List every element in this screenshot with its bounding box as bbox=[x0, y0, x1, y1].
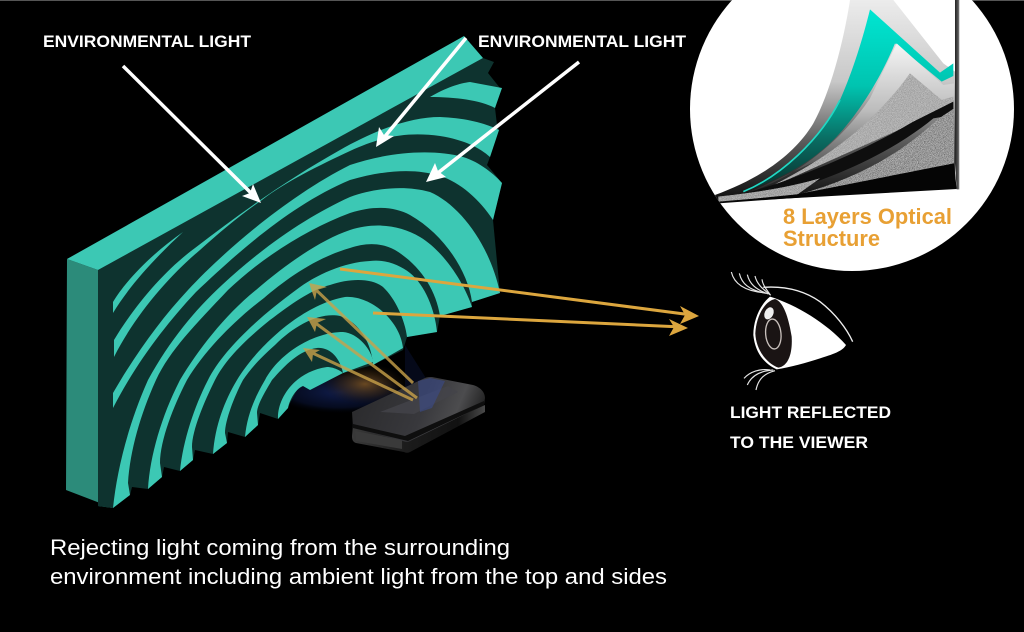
ray arrow 1 bbox=[309, 283, 413, 383]
reflected light arrows to viewer bbox=[340, 269, 699, 336]
white arrow middle bbox=[376, 38, 466, 147]
white arrow left bbox=[123, 66, 261, 203]
icon: viewer eye bbox=[731, 272, 853, 390]
reflected arrow upper bbox=[340, 269, 699, 324]
label: environmental light left: ENVIRONMENTAL LIGHT bbox=[43, 33, 251, 51]
pupil ring bbox=[764, 318, 782, 350]
caption: rejecting light description: Rejecting light coming from the surrounding bbox=[50, 535, 510, 560]
projector light glow bbox=[268, 345, 430, 414]
wall dark front face bbox=[98, 58, 502, 508]
reflected arrow lower bbox=[373, 313, 688, 336]
eyelashes bbox=[731, 272, 775, 390]
label: light reflected to the viewer: LIGHT REFLECTED bbox=[730, 404, 891, 422]
panel: 8 layers optical structure circle bbox=[690, 0, 1014, 271]
highlight bbox=[762, 306, 776, 321]
caption: 8 layers optical structure: 8 Layers Optical bbox=[783, 204, 952, 229]
caption: rejecting light description bbox=[50, 535, 667, 589]
wave-shaped screen wall bbox=[66, 36, 502, 508]
teal arc bands bbox=[113, 82, 502, 508]
caption: 8 layers optical structure bbox=[783, 204, 952, 251]
iris bbox=[755, 299, 792, 368]
projector top body bbox=[352, 377, 485, 442]
caption: 8 layers optical structure: Structure bbox=[783, 226, 880, 251]
label: environmental light right: ENVIRONMENTAL LIGHT bbox=[478, 33, 686, 51]
wall top band bbox=[67, 36, 483, 270]
label: light reflected to the viewer bbox=[730, 404, 891, 452]
eye white bbox=[753, 297, 846, 369]
caption: rejecting light description: environment including ambient light from the top and sides bbox=[50, 564, 667, 589]
wall left side face bbox=[66, 259, 113, 508]
ray arrow 3 bbox=[303, 348, 413, 400]
projector device bbox=[352, 377, 485, 453]
upper lid line bbox=[763, 287, 853, 342]
ray arrow 2 bbox=[307, 317, 417, 398]
layered film illustration bbox=[715, 0, 959, 203]
white environmental light arrows bbox=[123, 38, 579, 203]
projector blue lens glow bbox=[418, 378, 445, 412]
white arrow right bbox=[426, 62, 579, 182]
orange rays from projector to screen bbox=[303, 283, 417, 400]
projector vent grille bbox=[355, 431, 402, 449]
label: light reflected to the viewer: TO THE VIEWER bbox=[730, 434, 868, 452]
projector base bbox=[352, 405, 485, 453]
